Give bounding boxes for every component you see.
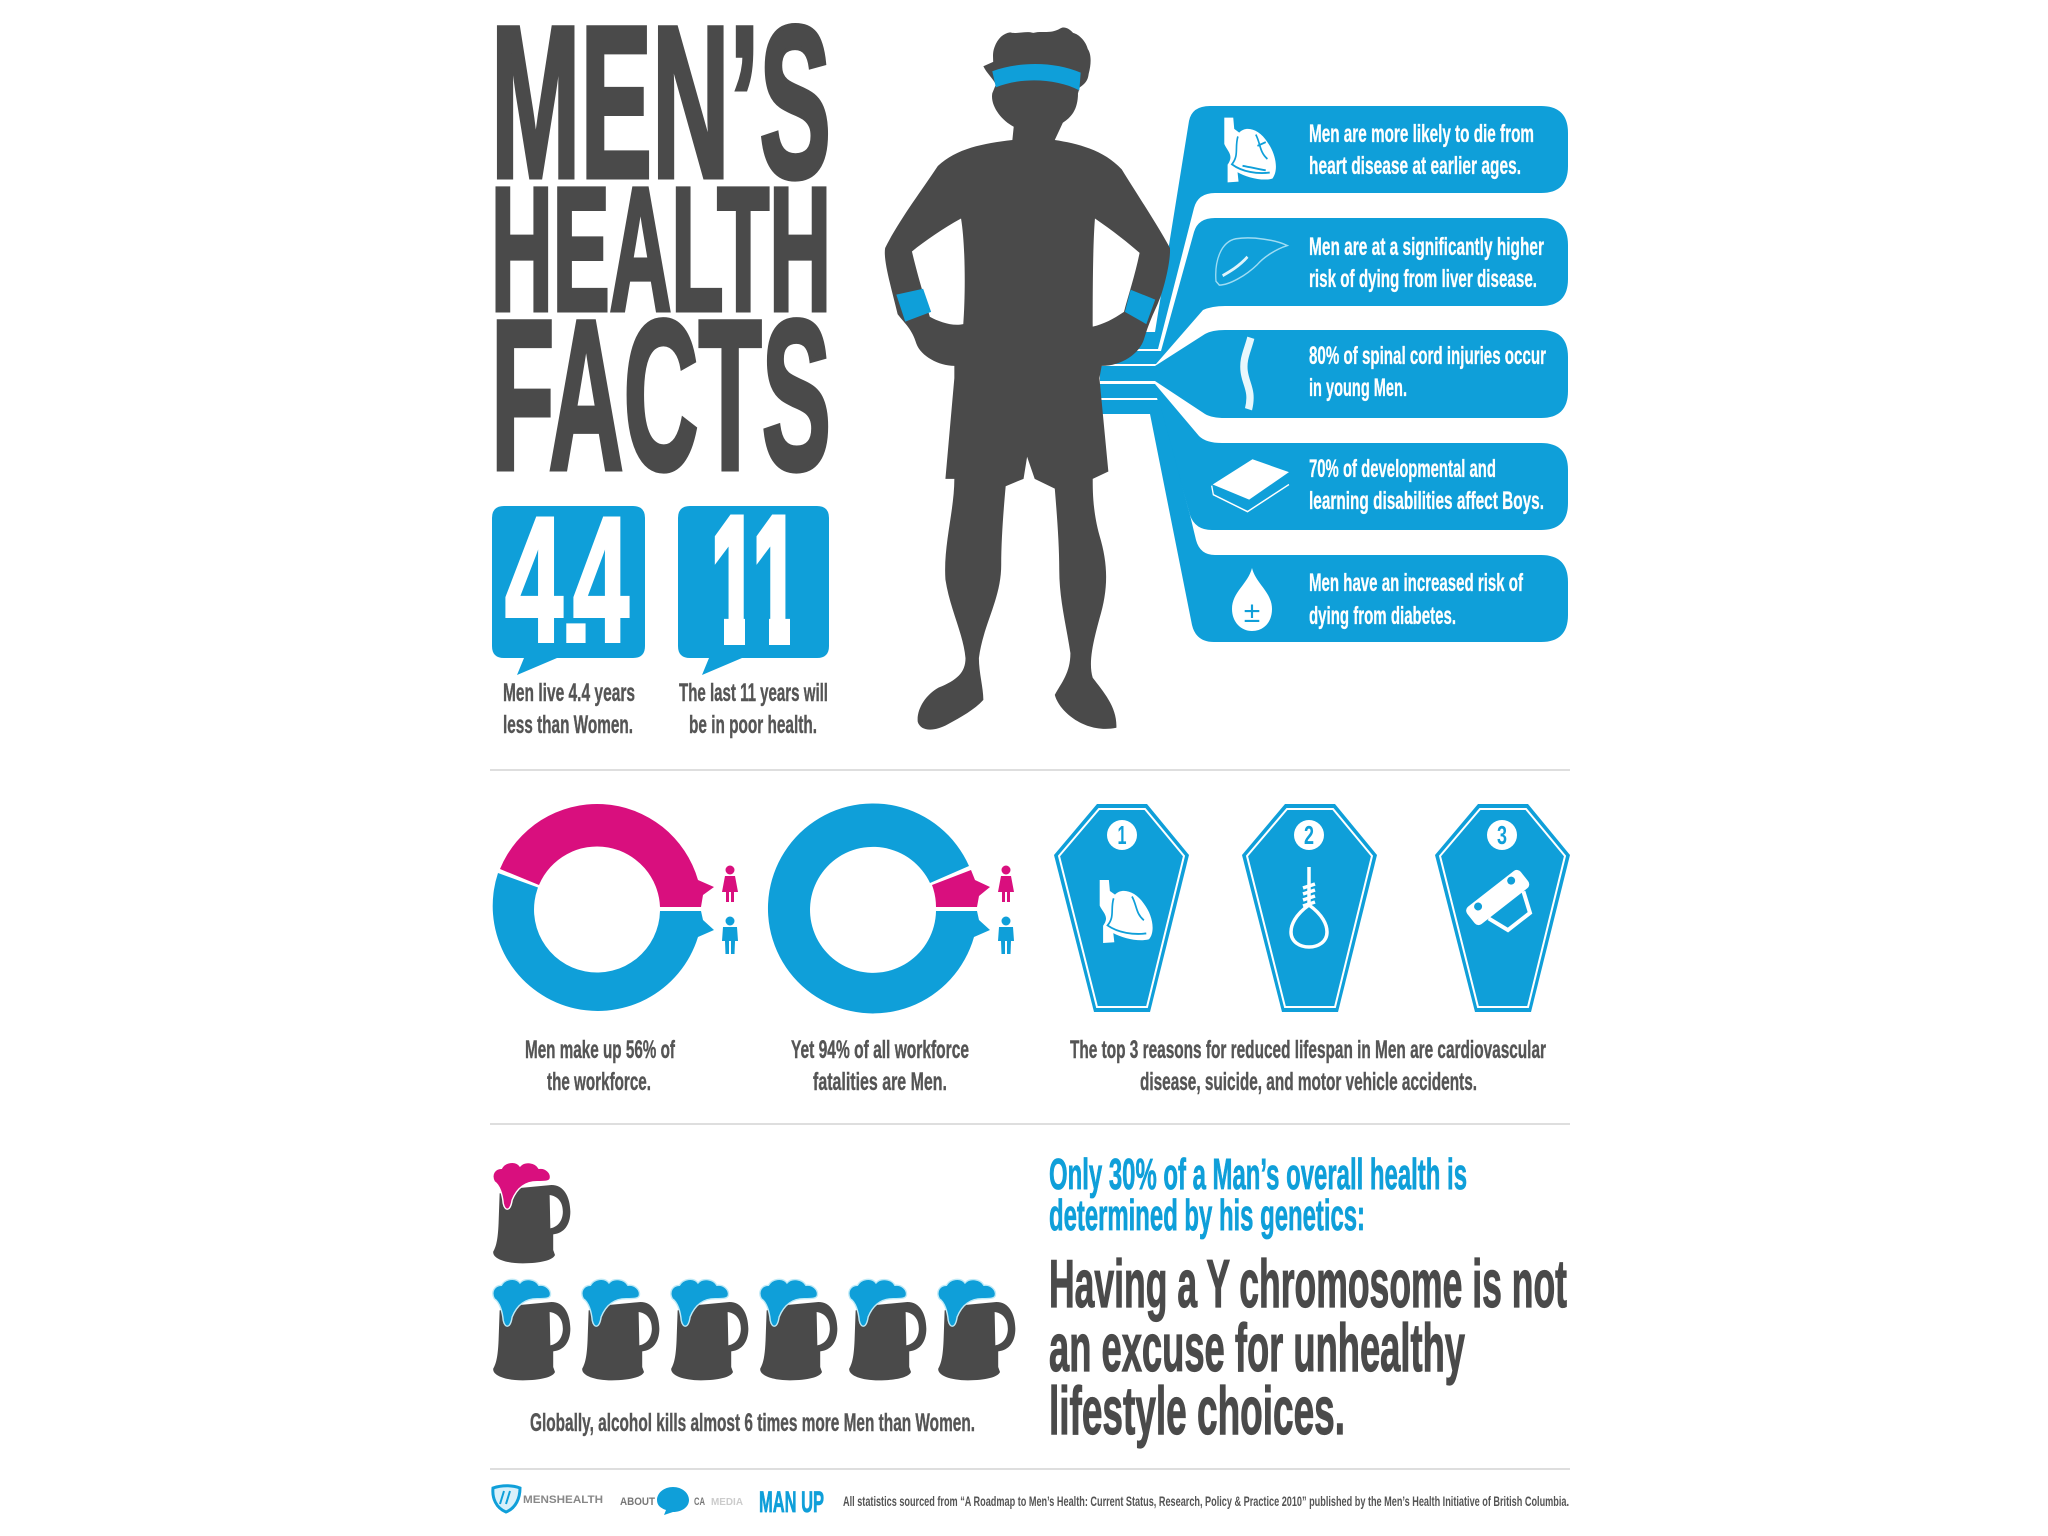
logo: about: CA [694, 1496, 705, 1508]
divider [490, 1123, 1570, 1125]
chart: workforce donut: Men make up 56% of [525, 1036, 675, 1064]
caption: top 3 reasons: The top 3 reasons for reduced lifespan in Men are cardiovascular [1070, 1036, 1546, 1064]
icon: liver [1216, 238, 1287, 285]
big number 4.4: . [557, 524, 595, 671]
chart: fatalities donut [768, 803, 1014, 1096]
heading: genetics: Only 30% of a Man’s overall health is [1049, 1150, 1467, 1199]
logo: men's health [493, 1486, 603, 1512]
panel: coffin 1 heart disease: 1 [1118, 820, 1126, 850]
icon: noose [1291, 867, 1327, 947]
divider [490, 1468, 1570, 1470]
panel: coffin 3 vehicle accidents [1435, 804, 1570, 1012]
figure: man silhouette [885, 27, 1170, 730]
icon: woman [722, 866, 738, 902]
panel: coffin 2 suicide [1242, 804, 1377, 1012]
icon: mug men 5 [849, 1279, 926, 1380]
caption: top 3 reasons: disease, suicide, and motor vehicle accidents. [1140, 1068, 1477, 1096]
panel: 11 years stat: 11 [711, 480, 799, 679]
icon: woman [998, 866, 1014, 902]
caption: top 3 reasons [1070, 1036, 1546, 1096]
logo: men's health: MENSHEALTH [523, 1494, 603, 1506]
text: FACTS [491, 276, 831, 515]
callout: learning disabilities [1100, 384, 1568, 530]
icon: man [722, 916, 738, 954]
icon: spine [1244, 338, 1251, 409]
icon: blood drop [1232, 568, 1272, 631]
logo: man up: MAN UP [759, 1486, 824, 1519]
divider [490, 769, 1570, 771]
callout: learning disabilities: 70% of developmental and [1309, 455, 1496, 483]
icon: heart [1100, 880, 1153, 943]
icon: book [1212, 459, 1289, 512]
caption: alcohol: Globally, alcohol kills almost 6 times more Men than Women. [530, 1409, 975, 1437]
heading: genetics [1049, 1150, 1467, 1240]
callout: diabetes: dying from diabetes. [1309, 602, 1456, 630]
chart: workforce donut [493, 804, 738, 1096]
callout: heart disease: heart disease at earlier ages. [1309, 152, 1521, 180]
callout: liver disease: risk of dying from liver disease. [1309, 265, 1537, 293]
text block: Y chromosome statement: lifestyle choices. [1049, 1373, 1345, 1449]
callout: diabetes [1100, 400, 1568, 642]
icon: mug men 1 [493, 1279, 570, 1380]
panel: coffin 3 vehicle accidents: 3 [1497, 820, 1507, 850]
big number 4.4: 4 [505, 480, 563, 679]
logo: about [620, 1487, 743, 1515]
callout: heart disease: Men are more likely to die from [1309, 120, 1534, 148]
icon: mug men 3 [671, 1279, 748, 1380]
panel: 11 years stat [678, 480, 829, 739]
logo: about: ABOUT [620, 1496, 655, 1508]
footer [493, 1486, 1569, 1519]
callout: heart disease [1110, 106, 1568, 349]
panel: 11 years stat: be in poor health. [689, 711, 817, 739]
panel: 4.4 years stat: Men live 4.4 years [503, 679, 635, 707]
callout: spinal cord injuries: 80% of spinal cord injuries occur [1309, 342, 1546, 370]
callout: spinal cord injuries: in young Men. [1309, 374, 1407, 402]
text block: Y chromosome statement: an excuse for unhealthy [1049, 1310, 1465, 1386]
callout: liver disease [1100, 218, 1568, 364]
chart: alcohol mugs [493, 1162, 1015, 1437]
panel: health risk callouts [1100, 106, 1568, 642]
callout: liver disease: Men are at a significantly higher [1309, 233, 1544, 261]
icon: man [998, 916, 1014, 954]
panel: coffin 2 suicide: 2 [1304, 820, 1314, 850]
panel: 4.4 years stat [492, 480, 645, 739]
icon: mug women [493, 1162, 570, 1263]
chart: workforce donut: the workforce. [547, 1068, 651, 1096]
source note: All statistics sourced from “A Roadmap to Men’s Health: Current Status, Research, Policy & Practice 2010” published by the Men’s Health Initiative of British Columbia. [843, 1493, 1569, 1509]
text block: Y chromosome statement: Having a Y chromosome is not [1049, 1246, 1567, 1322]
callout: learning disabilities: learning disabilities affect Boys. [1309, 487, 1544, 515]
chart: fatalities donut: Yet 94% of all workforce [791, 1036, 969, 1064]
right wristband [1125, 290, 1155, 324]
big number 4.4: 4 [573, 480, 629, 679]
chart: fatalities donut: fatalities are Men. [813, 1068, 947, 1096]
heading: genetics: determined by his genetics: [1049, 1191, 1365, 1240]
text: HEALTH [491, 152, 831, 348]
base trim of numerals [700, 610, 812, 650]
icon: overturned car [1464, 868, 1544, 944]
icon: heart [1224, 118, 1276, 182]
icon: mug men 2 [582, 1279, 659, 1380]
callout: spinal cord injuries [1100, 330, 1568, 418]
icon: mug men 4 [760, 1279, 837, 1380]
title [491, 0, 831, 515]
text block: Y chromosome statement [1049, 1246, 1567, 1449]
headband [992, 64, 1081, 90]
callout: diabetes: Men have an increased risk of [1309, 569, 1523, 597]
panel: coffin 1 heart disease [1054, 804, 1189, 1012]
panel: 11 years stat: The last 11 years will [679, 679, 828, 707]
logo: about: MEDIA [711, 1497, 743, 1508]
icon: mug men 6 [938, 1279, 1015, 1380]
icon: blood drop: ± [1244, 596, 1260, 629]
panel: 4.4 years stat: less than Women. [503, 711, 633, 739]
left wristband [896, 289, 931, 322]
